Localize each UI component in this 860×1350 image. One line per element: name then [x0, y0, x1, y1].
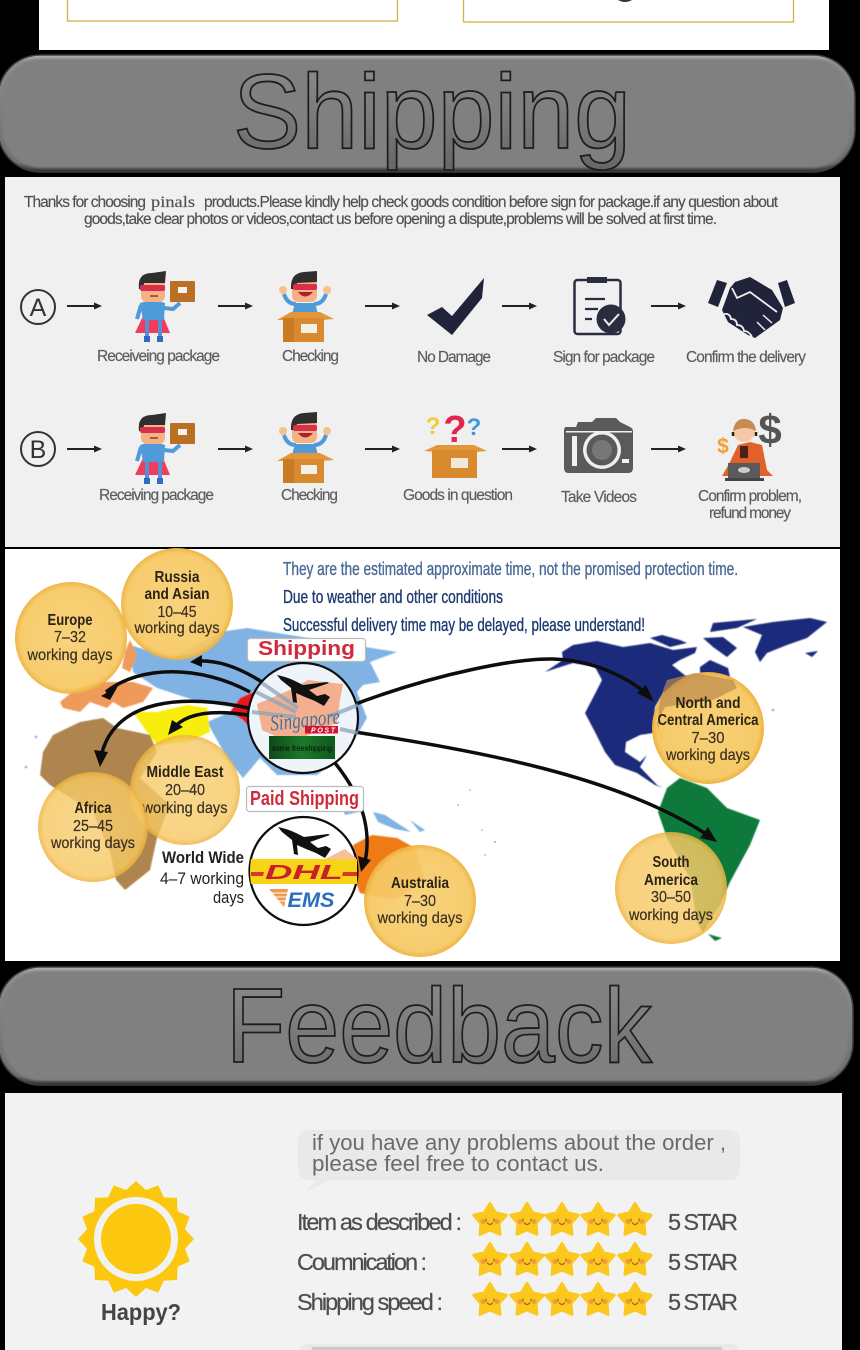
callout: Australia: working days — [377, 910, 462, 927]
courier circle — [250, 817, 358, 925]
rating: communication: Coumnication : — [297, 1249, 427, 1275]
land: South America — [658, 778, 760, 932]
speech bubble: contact: if you have any problems about the order , — [312, 1130, 726, 1155]
intro text: Thanks for choosing — [24, 194, 146, 211]
icon: hero with package B — [135, 413, 195, 484]
callout: North and Central America: working days — [665, 747, 750, 764]
labels row A: Receiveing package — [97, 348, 220, 365]
callout: South America: working days — [628, 907, 713, 924]
icon: check mark — [427, 278, 484, 335]
panel: delivery process — [5, 177, 840, 547]
text: World Wide: 4–7 working — [160, 870, 244, 888]
clipped glyph fragment — [618, 0, 632, 2]
callout: Europe: working days — [27, 647, 112, 664]
callout: Europe — [15, 582, 127, 694]
text: Happy?: Happy? — [101, 1299, 181, 1325]
row B process — [21, 406, 802, 522]
intro text: goods,take clear photos or videos,contact us before opening a dispute,problems will be solved at first time. — [84, 211, 717, 228]
badge A: A — [30, 294, 47, 322]
labels row A: Confirm the delivery — [686, 349, 806, 366]
labels row B — [99, 487, 802, 522]
labels row B: Confirm problem, — [698, 488, 802, 505]
callout: Europe: Europe — [48, 612, 93, 629]
outlined box left — [68, 0, 398, 21]
explanatory notes: Successful delivery time may be delayed, please understand! — [283, 615, 645, 635]
callout: Australia: 7–30 — [404, 893, 436, 910]
rating: shipping speed — [297, 1284, 738, 1315]
callout: Middle East — [130, 735, 240, 845]
rating: shipping speed: Shipping speed : — [297, 1289, 443, 1315]
map land masses — [40, 618, 827, 941]
land: Indonesia and islands — [285, 790, 425, 832]
icon: sun — [78, 1181, 194, 1297]
callout: Africa: Africa — [74, 800, 112, 817]
callout: North and Central America: North and — [676, 695, 740, 712]
labels row A: Checking — [282, 348, 339, 365]
text: World Wide: days — [213, 889, 244, 907]
badge B — [21, 432, 55, 466]
rating: communication — [297, 1244, 738, 1275]
post circle — [248, 663, 358, 773]
callout: Middle East: 20–40 — [165, 782, 205, 799]
Singapore script: Singapore — [269, 703, 341, 736]
land: Arctic islands — [650, 619, 818, 677]
labels row A — [97, 348, 806, 366]
callout: North and Central America — [652, 672, 764, 784]
heading text: Shipping: Shipping — [233, 53, 631, 171]
land: Tierra del Fuego — [708, 934, 722, 941]
land: Asia — [130, 628, 397, 778]
callout: Africa — [38, 772, 148, 882]
land: North America — [545, 641, 697, 788]
callout: South America: America — [644, 872, 698, 889]
explanatory notes: Due to weather and other conditions — [283, 587, 503, 607]
text: World Wide — [160, 849, 244, 907]
airplane — [277, 675, 330, 706]
rays — [252, 683, 358, 733]
callout: Russia and Asian: working days — [134, 620, 220, 637]
badge B: B — [30, 436, 46, 464]
row A process — [21, 271, 806, 366]
arrows row A — [67, 302, 686, 310]
labels row B: refund money — [709, 505, 791, 522]
labels row B: Take Videos — [561, 489, 637, 506]
callout: South America — [615, 832, 727, 944]
land: Middle East — [133, 705, 210, 745]
rating: item as described — [297, 1204, 738, 1235]
callout: Africa: working days — [50, 835, 135, 852]
icon: clipboard — [574, 277, 626, 334]
heading bar: Feedback — [0, 967, 853, 1085]
labels row A: Sign for package — [553, 349, 655, 366]
explanatory notes — [283, 559, 738, 635]
map island dots — [24, 708, 774, 856]
EMS logo: EMS — [288, 889, 334, 912]
text: World Wide: World Wide — [162, 849, 244, 867]
speech bubble: contact — [298, 1130, 740, 1192]
rating: shipping speed: 5 STAR — [668, 1289, 738, 1315]
outlined box right — [464, 0, 794, 22]
icon: question box: ? — [467, 414, 481, 441]
icon: hero checking box — [277, 271, 334, 342]
route arrows — [94, 655, 717, 872]
labels row B: Checking — [281, 487, 338, 504]
callout: Russia and Asian: and Asian — [144, 586, 210, 603]
panel: top white card remnant — [39, 0, 829, 50]
arrowheads — [94, 655, 717, 872]
post tag: POST — [311, 728, 336, 734]
rating: item as described: Item as described : — [297, 1209, 462, 1235]
callout: Australia — [364, 845, 476, 957]
callout: Australia: Australia — [391, 875, 449, 892]
DHL band: DHL — [265, 862, 343, 884]
icon: hero checking box B — [277, 412, 334, 483]
land: Europe — [60, 682, 153, 712]
badge A — [21, 290, 55, 324]
labels row A: No Damage — [417, 349, 491, 366]
heading bar: Shipping — [0, 53, 855, 172]
rating: item as described: 5 STAR — [668, 1209, 738, 1235]
free shipping tag: some freeshipping — [272, 744, 332, 753]
intro text: products.Please kindly help check goods condition before sign for package.if any question about — [204, 194, 779, 211]
land: Greenland — [743, 618, 827, 662]
land: Africa — [40, 718, 170, 890]
badge: Paid Shipping label: Paid Shipping — [250, 788, 359, 810]
callout: Europe: 7–32 — [54, 629, 86, 646]
callout: Russia and Asian: Russia — [154, 569, 200, 586]
heading text: Feedback: Feedback — [226, 967, 653, 1085]
intro text: pinals — [151, 194, 195, 211]
land inside courier circle — [323, 849, 356, 872]
badge: Shipping label: Shipping — [258, 638, 355, 660]
land: highlighted region — [230, 692, 256, 735]
icon: camera — [564, 418, 633, 473]
callout: North and Central America: 7–30 — [692, 730, 725, 747]
icon: support agent with dollars: $ — [717, 435, 729, 458]
circle callouts — [15, 548, 764, 957]
intro text — [24, 194, 779, 228]
icon: question box — [424, 409, 487, 478]
callout: Middle East: working days — [142, 800, 228, 817]
panel: feedback ratings — [5, 1093, 842, 1350]
rating: communication: 5 STAR — [668, 1249, 738, 1275]
badge: Shipping label — [248, 638, 366, 662]
speech bubble: clipped lower note — [298, 1344, 740, 1350]
callout: Africa: 25–45 — [73, 818, 113, 835]
icon: handshake — [708, 277, 795, 338]
icon: question box: ? — [426, 413, 440, 440]
callout: South America: 30–50 — [651, 889, 691, 906]
callout: Middle East: Middle East — [146, 764, 224, 781]
icon: support agent with dollars — [717, 406, 782, 481]
panel: world shipping map — [5, 548, 840, 961]
callout: North and Central America: Central America — [658, 712, 759, 729]
callout: South America: South — [652, 854, 690, 871]
arrows row B — [67, 446, 686, 452]
icon: support agent with dollars: $ — [758, 406, 782, 453]
callout: Russia and Asian — [121, 548, 233, 660]
icon: hero with package — [135, 271, 195, 342]
icon: question box: ? — [443, 409, 467, 451]
callout: Russia and Asian: 10–45 — [158, 604, 197, 621]
land: Australia — [353, 835, 425, 900]
labels row B: Goods in question — [403, 487, 513, 504]
airplane — [278, 827, 331, 858]
land inside post circle — [257, 680, 343, 743]
speech bubble: contact: please feel free to contact us. — [312, 1151, 604, 1176]
land: Scandinavia — [122, 640, 137, 672]
labels row B: Receiving package — [99, 487, 214, 504]
